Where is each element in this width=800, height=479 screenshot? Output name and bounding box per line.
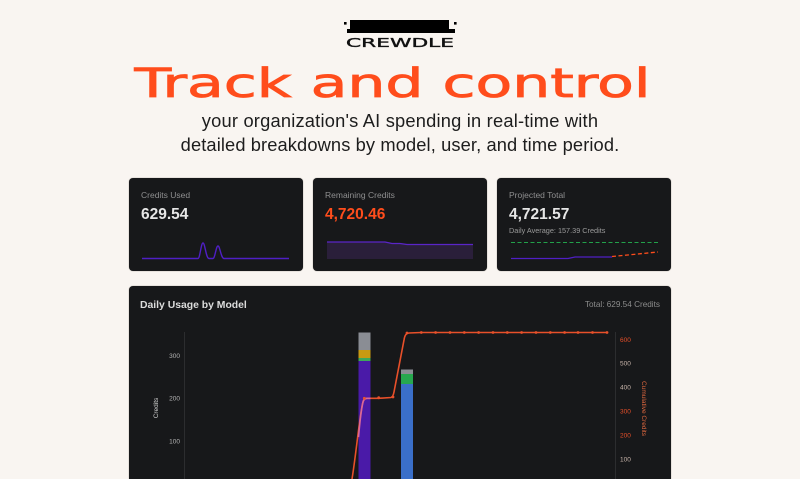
right axis: 200 [620,432,631,440]
left axis: 100 [169,438,180,446]
left axis: Credits [153,397,160,418]
logo: Crewdle: CREWDLE [346,36,454,50]
cumulative line [352,331,608,479]
left axis [153,332,616,479]
label: projected total: Projected Total [509,190,565,200]
total credits: Total: 629.54 Credits [585,300,660,309]
subtitle line 2: detailed breakdowns by model, user, and time period. [181,134,619,155]
right axis: 100 [620,456,631,464]
subtitle line 1: your organization's AI spending in real-time with [202,110,598,131]
left axis: 200 [169,396,180,402]
panel: credits used [129,178,303,271]
sparkline: projected total [511,242,658,260]
value: credits used: 629.54 [141,206,188,223]
daily average: Daily Average: 157.39 Credits [509,226,605,235]
sparkline: remaining credits [327,241,473,259]
combo chart [153,331,647,479]
value: projected total: 4,721.57 [509,206,569,223]
sparkline: credits used [142,242,289,260]
right axis: 300 [620,408,631,416]
label: remaining credits: Remaining Credits [325,190,395,200]
panel: daily usage by model [129,286,671,479]
stacked bar: day two [401,370,413,479]
stacked bar: day one [358,332,370,479]
label: credits used: Credits Used [141,190,190,200]
panel: remaining credits [313,178,487,271]
panel: projected total [497,178,671,271]
heading: daily usage by model: Daily Usage by Model [140,300,247,310]
value: remaining credits: 4,720.46 [325,206,385,223]
right axis [620,337,647,464]
right axis: 500 [620,360,631,368]
left axis: 300 [169,353,180,360]
right axis: Cumulative Credits [640,381,647,437]
right axis: 600 [620,337,631,344]
logo: Crewdle [344,20,457,50]
right axis: 400 [620,384,631,392]
